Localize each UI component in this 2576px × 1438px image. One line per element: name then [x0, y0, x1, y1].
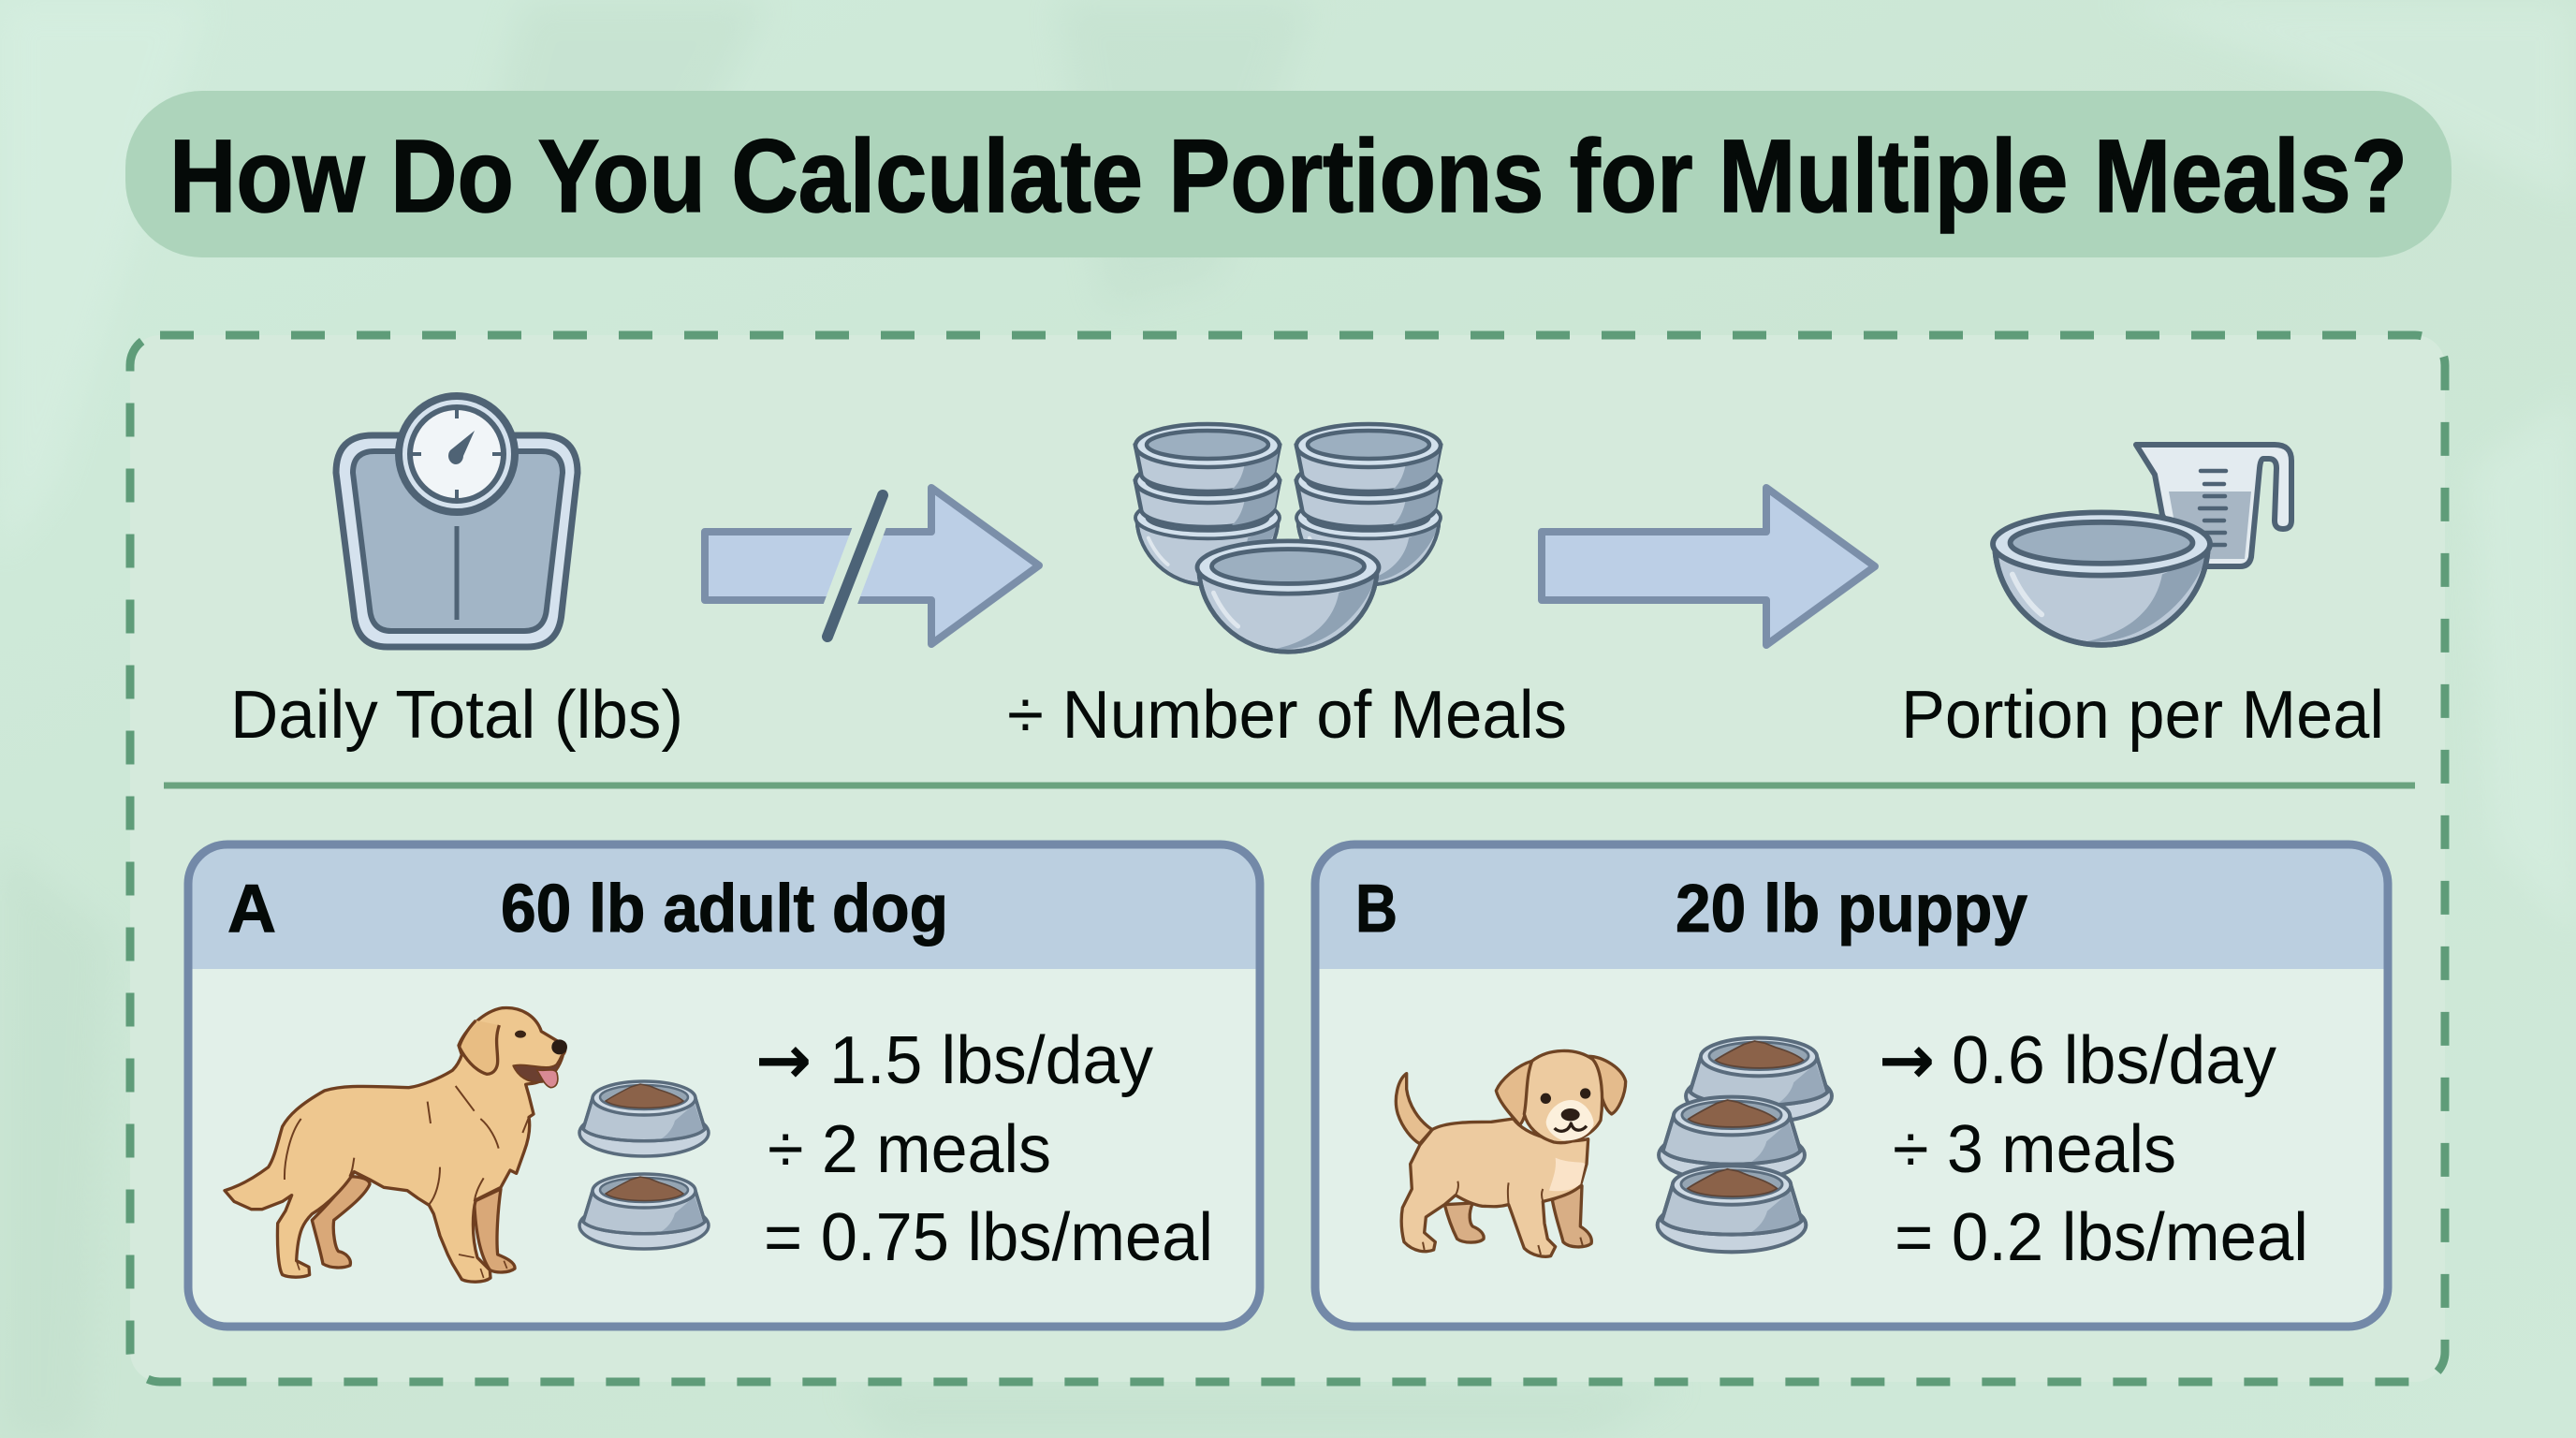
- label: number of meals: ÷ Number of Meals: [1007, 678, 1567, 753]
- calculation text B: 0.6 lbs/day: [1952, 1023, 2276, 1098]
- heading: 20 lb puppy: 20 lb puppy: [1676, 872, 2027, 946]
- calculation text B: = 0.2 lbs/meal: [1895, 1200, 2308, 1275]
- arrow: divide: [705, 479, 1039, 653]
- calculation text A: ÷ 2 meals: [768, 1112, 1051, 1187]
- main dashed panel: [130, 335, 2445, 1382]
- title banner: [125, 91, 2452, 257]
- arrow: result: [1542, 488, 1875, 645]
- icon: stacked bowls: [1135, 424, 1441, 652]
- icon: food bowl top: [1686, 1038, 1832, 1123]
- icon: weighing scale: [336, 396, 578, 647]
- calculation text B: →: [1879, 1020, 1935, 1099]
- label: portion per meal: Portion per Meal: [1901, 678, 2384, 753]
- icon: food bowl bottom: [1658, 1166, 1806, 1252]
- calculation text B: [1879, 1020, 2308, 1275]
- case letter B: B: [1355, 872, 1398, 946]
- calculation text A: = 0.75 lbs/meal: [764, 1200, 1213, 1275]
- calculation text B: ÷ 3 meals: [1893, 1112, 2176, 1187]
- panel: case A adult dog: [188, 844, 1260, 1327]
- panel: case B puppy: [1315, 844, 2388, 1327]
- icon: food bowl top: [579, 1081, 709, 1156]
- calculation text A: 1.5 lbs/day: [829, 1023, 1153, 1098]
- icon: bowl with measuring cup: [1993, 445, 2291, 645]
- case letter A: A: [227, 872, 276, 946]
- calculation text A: [755, 1020, 1213, 1275]
- calculation text A: →: [755, 1020, 812, 1099]
- heading: 60 lb adult dog: 60 lb adult dog: [501, 872, 948, 946]
- label: daily total: Daily Total (lbs): [230, 678, 683, 753]
- icon: food bowl bottom: [579, 1174, 709, 1249]
- icon: food bowl middle: [1659, 1097, 1805, 1181]
- illustration: adult golden dog: [225, 1008, 567, 1282]
- illustration: puppy: [1396, 1050, 1626, 1256]
